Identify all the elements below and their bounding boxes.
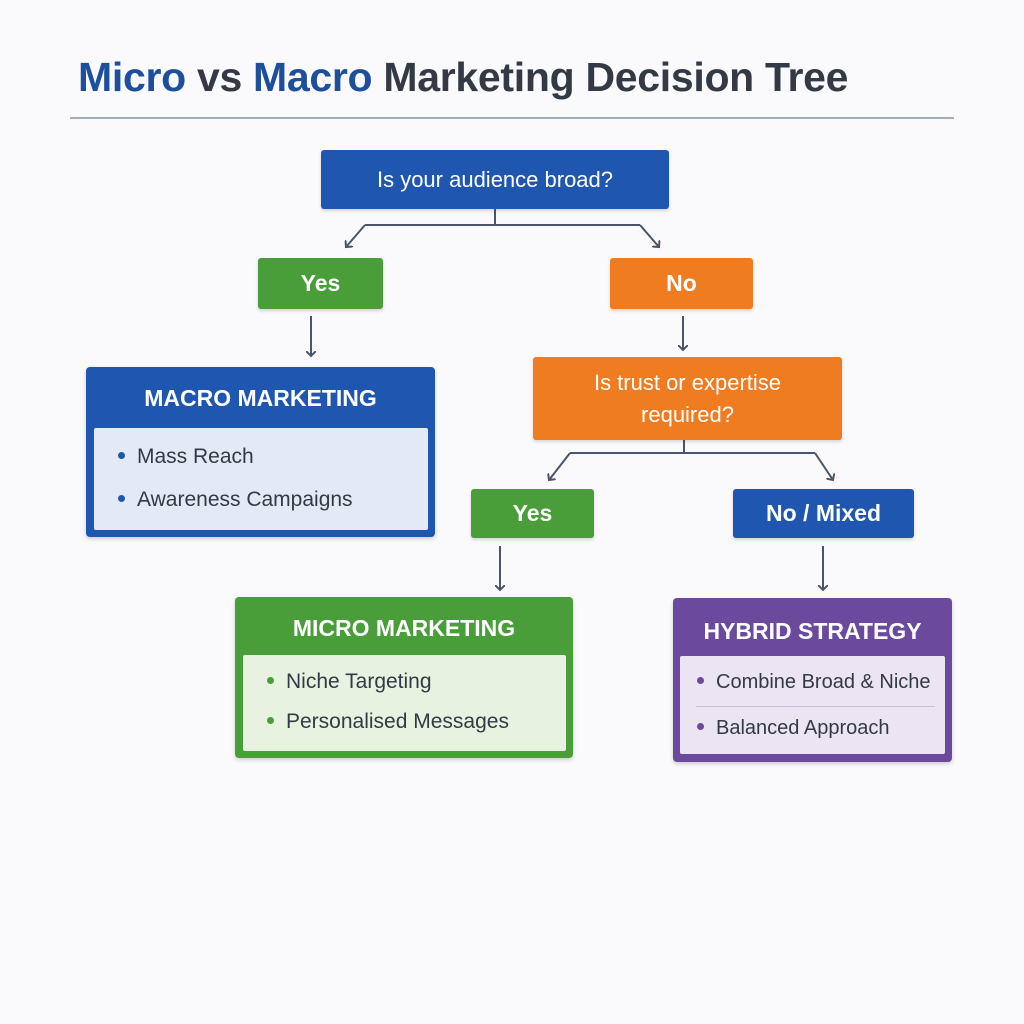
label: yes (broad): Yes (301, 270, 340, 296)
panel: macro marketing: Mass Reach (137, 445, 254, 468)
title: Micro vs Macro Marketing Decision Tree (78, 54, 848, 100)
panel: hybrid strategy: HYBRID STRATEGY (703, 618, 922, 644)
panel: hybrid strategy: Balanced Approach (716, 717, 889, 739)
panel: macro marketing: MACRO MARKETING (144, 385, 377, 411)
question: trust or expertise: required? (641, 402, 734, 426)
panel: micro marketing: Personalised Messages (286, 710, 509, 733)
panel: micro marketing: MICRO MARKETING (293, 615, 515, 641)
question: trust or expertise: Is trust or expertise (594, 370, 781, 394)
question: audience broad (321, 150, 669, 209)
panel: macro marketing (86, 367, 435, 537)
label: no / mixed: No / Mixed (766, 500, 881, 526)
label: yes (trust) (471, 489, 594, 538)
panel: micro marketing (235, 597, 573, 758)
question: audience broad: Is your audience broad? (377, 166, 613, 192)
panel: micro marketing: Niche Targeting (286, 670, 432, 693)
label: no (broad) (610, 258, 753, 309)
label: no (broad): No (666, 270, 697, 296)
panel: hybrid strategy: Combine Broad & Niche (716, 671, 931, 693)
label: no / mixed (733, 489, 914, 538)
label: yes (trust): Yes (513, 500, 552, 526)
question: trust or expertise (533, 357, 842, 440)
label: yes (broad) (258, 258, 383, 309)
panel: hybrid strategy (673, 598, 952, 762)
panel: macro marketing: Awareness Campaigns (137, 488, 353, 511)
